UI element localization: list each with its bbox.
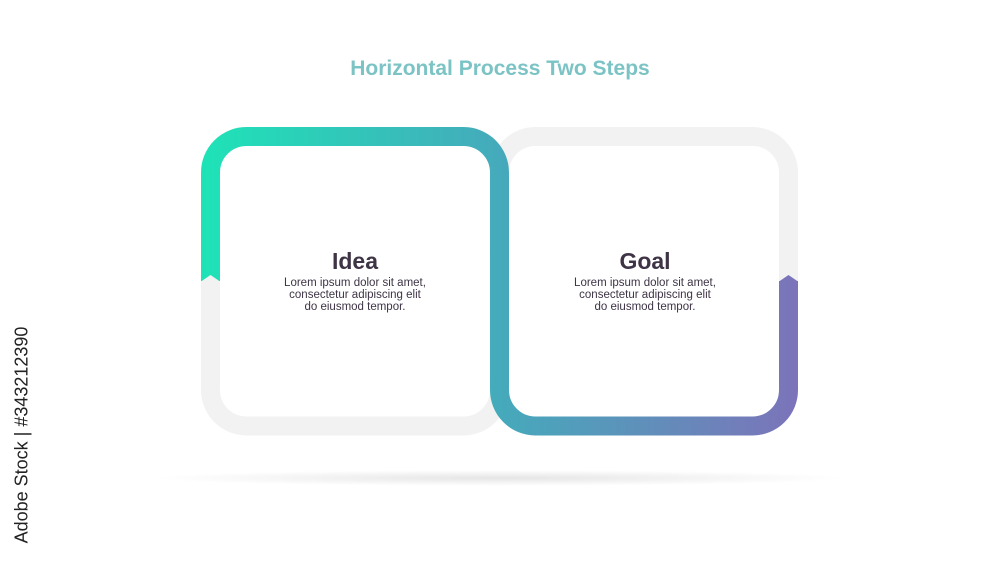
- step 2: Goal: do eiusmod tempor.: [594, 301, 696, 313]
- step 2: Goal: Lorem ipsum dolor sit amet,: [574, 277, 716, 289]
- step 2: Goal: [574, 248, 716, 313]
- step 1: Idea: [284, 248, 426, 313]
- grey outlines: [210, 136, 788, 426]
- watermark id: Adobe Stock | #343212390: [12, 327, 32, 543]
- step 1: Idea: do eiusmod tempor.: [304, 301, 406, 313]
- step 1: Idea: consectetur adipiscing elit: [289, 289, 421, 301]
- step 1: Idea: Lorem ipsum dolor sit amet,: [284, 277, 426, 289]
- step 1: Idea: Idea: [332, 248, 378, 274]
- step 2: Goal: Goal: [619, 248, 671, 274]
- title: Horizontal Process Two Steps: [350, 57, 650, 80]
- gradient process path: [201, 136, 798, 426]
- shadow: [150, 470, 850, 486]
- step 2: Goal: consectetur adipiscing elit: [579, 289, 711, 301]
